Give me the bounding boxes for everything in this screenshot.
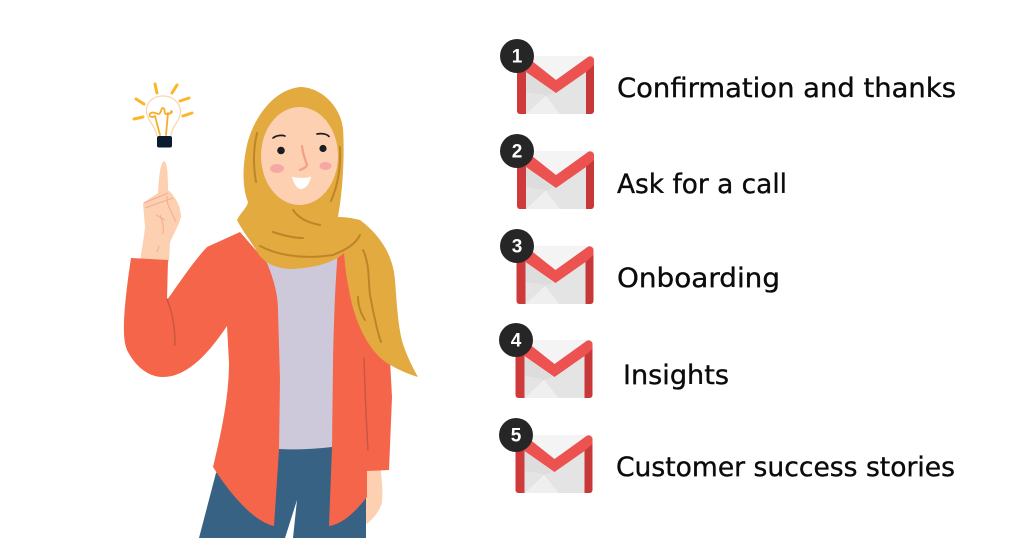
label 2: Ask for a call	[617, 169, 787, 200]
label 1: Confirmation and thanks	[617, 73, 956, 104]
other hand	[365, 465, 382, 525]
facial features	[270, 134, 332, 189]
badge 4	[499, 323, 533, 357]
badge 4: 4	[511, 330, 522, 352]
icon: envelope 4	[516, 340, 593, 398]
email row 1	[500, 39, 956, 114]
hijab fold lines	[254, 133, 381, 342]
icon: envelope 3	[516, 246, 594, 304]
hijab	[237, 87, 418, 377]
email row 5	[499, 418, 955, 493]
badge 1: 1	[512, 46, 523, 68]
badge 3	[500, 229, 534, 263]
badge 3: 3	[512, 236, 522, 258]
email row 3	[500, 229, 780, 304]
jeans	[199, 445, 366, 538]
cardigan fold lines	[167, 299, 368, 450]
label 3: Onboarding	[617, 263, 780, 294]
badge 2	[500, 134, 534, 168]
hand and finger	[140, 161, 181, 262]
illustration: woman pointing at a light bulb	[124, 84, 418, 538]
icon: envelope 5	[516, 435, 593, 493]
label 5: Customer success stories	[616, 452, 955, 483]
top	[262, 250, 340, 449]
badge 5: 5	[511, 426, 522, 446]
label 4: Insights	[623, 360, 729, 391]
email row 4	[499, 323, 729, 398]
icon: envelope 1	[517, 56, 594, 114]
icon: light bulb	[134, 84, 192, 148]
icon: envelope 2	[517, 151, 594, 209]
badge 1	[500, 39, 534, 73]
cardigan	[124, 232, 280, 526]
face	[261, 107, 338, 205]
email row 2	[500, 134, 787, 209]
hand detail lines	[144, 193, 176, 252]
badge 2: 2	[512, 142, 522, 162]
badge 5	[499, 418, 533, 452]
